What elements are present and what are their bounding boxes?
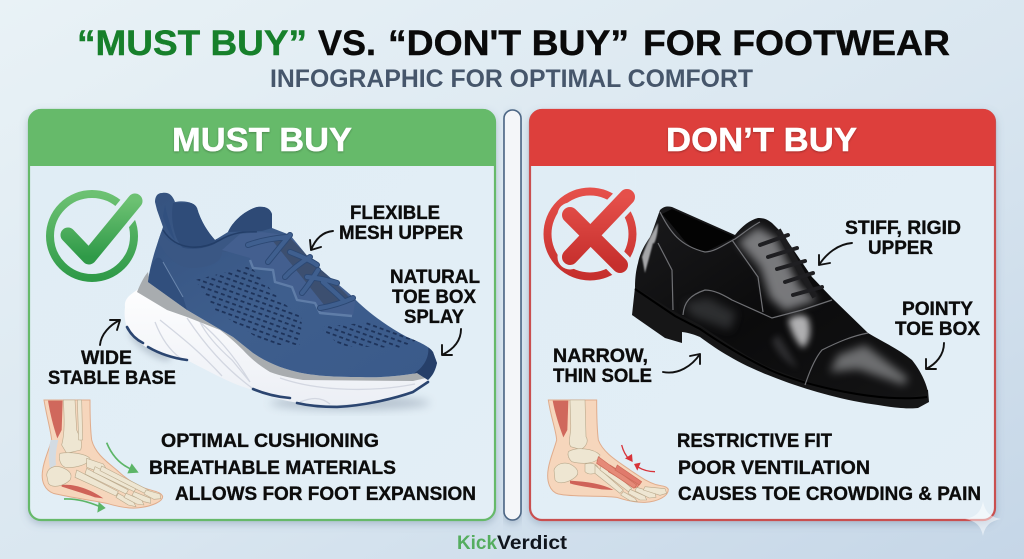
laces: [248, 235, 353, 308]
brand logo: [457, 532, 568, 554]
welt line: [635, 289, 927, 398]
brand logo: Kick: [457, 532, 497, 554]
label: natural toe box splay: TOE BOX: [392, 286, 476, 308]
label: natural toe box splay: NATURAL: [390, 266, 480, 288]
white foam midsole: [125, 280, 428, 405]
title: “DON'T BUY”: [388, 24, 629, 63]
arrow: pressure from above: [622, 445, 633, 462]
polished upper: [635, 206, 928, 399]
arrow: flexible mesh upper: [310, 231, 333, 250]
title: “MUST BUY”: [77, 24, 307, 63]
must buy benefits list: BREATHABLE MATERIALS: [149, 457, 396, 479]
heel counter: [148, 263, 187, 310]
arrow: stiff rigid upper: [819, 243, 852, 265]
tongue: [228, 207, 272, 232]
label: pointy toe box: POINTY: [902, 298, 973, 320]
label: wide stable base: WIDE: [81, 347, 132, 369]
label: narrow, thin sole: THIN SOLE: [553, 365, 652, 387]
panel: don't buy: [530, 109, 995, 520]
label: flexible mesh upper: MESH UPPER: [339, 222, 463, 244]
brand logo: Verdict: [497, 532, 568, 554]
icon: sparkle watermark: [965, 501, 1001, 536]
arrow: foot sole motion: [64, 499, 106, 513]
padded collar: [158, 232, 214, 250]
label: natural toe box splay: [390, 266, 480, 328]
don't buy heading: DON’T BUY: [666, 121, 857, 158]
mesh perforations: [196, 267, 416, 348]
label: natural toe box splay: SPLAY: [404, 306, 464, 328]
don't buy header bar: [530, 109, 995, 166]
knit upper: [148, 193, 437, 380]
label: narrow, thin sole: [553, 345, 652, 387]
must buy heading: MUST BUY: [172, 121, 352, 158]
label: flexible mesh upper: [339, 202, 463, 244]
don't buy drawbacks list: CAUSES TOE CROWDING & PAIN: [678, 483, 981, 505]
laces: [760, 235, 822, 295]
arrow: pressure from side: [634, 463, 655, 472]
oxford shoe illustration: [632, 206, 929, 408]
lace strip: [778, 230, 815, 297]
panel: must buy: [29, 109, 495, 520]
arrow: narrow thin sole: [663, 354, 700, 373]
toe bumper: [413, 347, 437, 380]
label: flexible mesh upper: FLEXIBLE: [350, 202, 440, 224]
label: stiff, rigid upper: UPPER: [868, 237, 933, 259]
eyestay: [222, 232, 352, 296]
arrow: pointy toe box: [926, 343, 944, 369]
grey midsole band: [137, 272, 426, 381]
subtitle: INFOGRAPHIC FOR OPTIMAL COMFORT: [270, 65, 753, 93]
label: stiff, rigid upper: STIFF, RIGID: [845, 217, 961, 239]
arrow: wide stable base: [100, 320, 120, 345]
title: [77, 24, 950, 63]
arrow: natural toe box splay: [442, 329, 461, 355]
label: narrow, thin sole: NARROW,: [553, 345, 648, 367]
sneaker illustration: [125, 193, 438, 410]
label: pointy toe box: [895, 298, 980, 340]
arrow: foot top motion: [107, 443, 139, 473]
must buy benefits list: ALLOWS FOR FOOT EXPANSION: [175, 483, 476, 505]
must buy header bar: [29, 109, 495, 166]
foot anatomy: healthy: [42, 400, 163, 513]
outsole segments: [127, 327, 428, 407]
don't buy drawbacks list: RESTRICTIVE FIT: [677, 430, 832, 452]
label: stiff, rigid upper: [845, 217, 961, 259]
title: VS.: [318, 24, 376, 63]
glossy highlights: [642, 223, 658, 273]
label: wide stable base: STABLE BASE: [48, 367, 176, 389]
must buy benefits list: [149, 430, 476, 505]
icon: green check in circle: [50, 194, 135, 278]
don't buy drawbacks list: POOR VENTILATION: [678, 457, 870, 479]
centre divider: [504, 110, 521, 520]
label: pointy toe box: TOE BOX: [895, 318, 980, 340]
heel block and sole: [632, 287, 929, 408]
label: wide stable base: [48, 347, 176, 389]
foam facets: [155, 318, 415, 404]
collar opening: [662, 209, 735, 252]
foot anatomy: constricted: [548, 400, 668, 502]
collar opening: [172, 203, 218, 250]
title: FOR FOOTWEAR: [643, 24, 950, 63]
stitching: [658, 212, 868, 385]
lace gap: [272, 238, 350, 306]
must buy benefits list: OPTIMAL CUSHIONING: [161, 430, 379, 452]
icon: red cross in circle: [548, 192, 632, 276]
don't buy drawbacks list: [677, 430, 981, 505]
